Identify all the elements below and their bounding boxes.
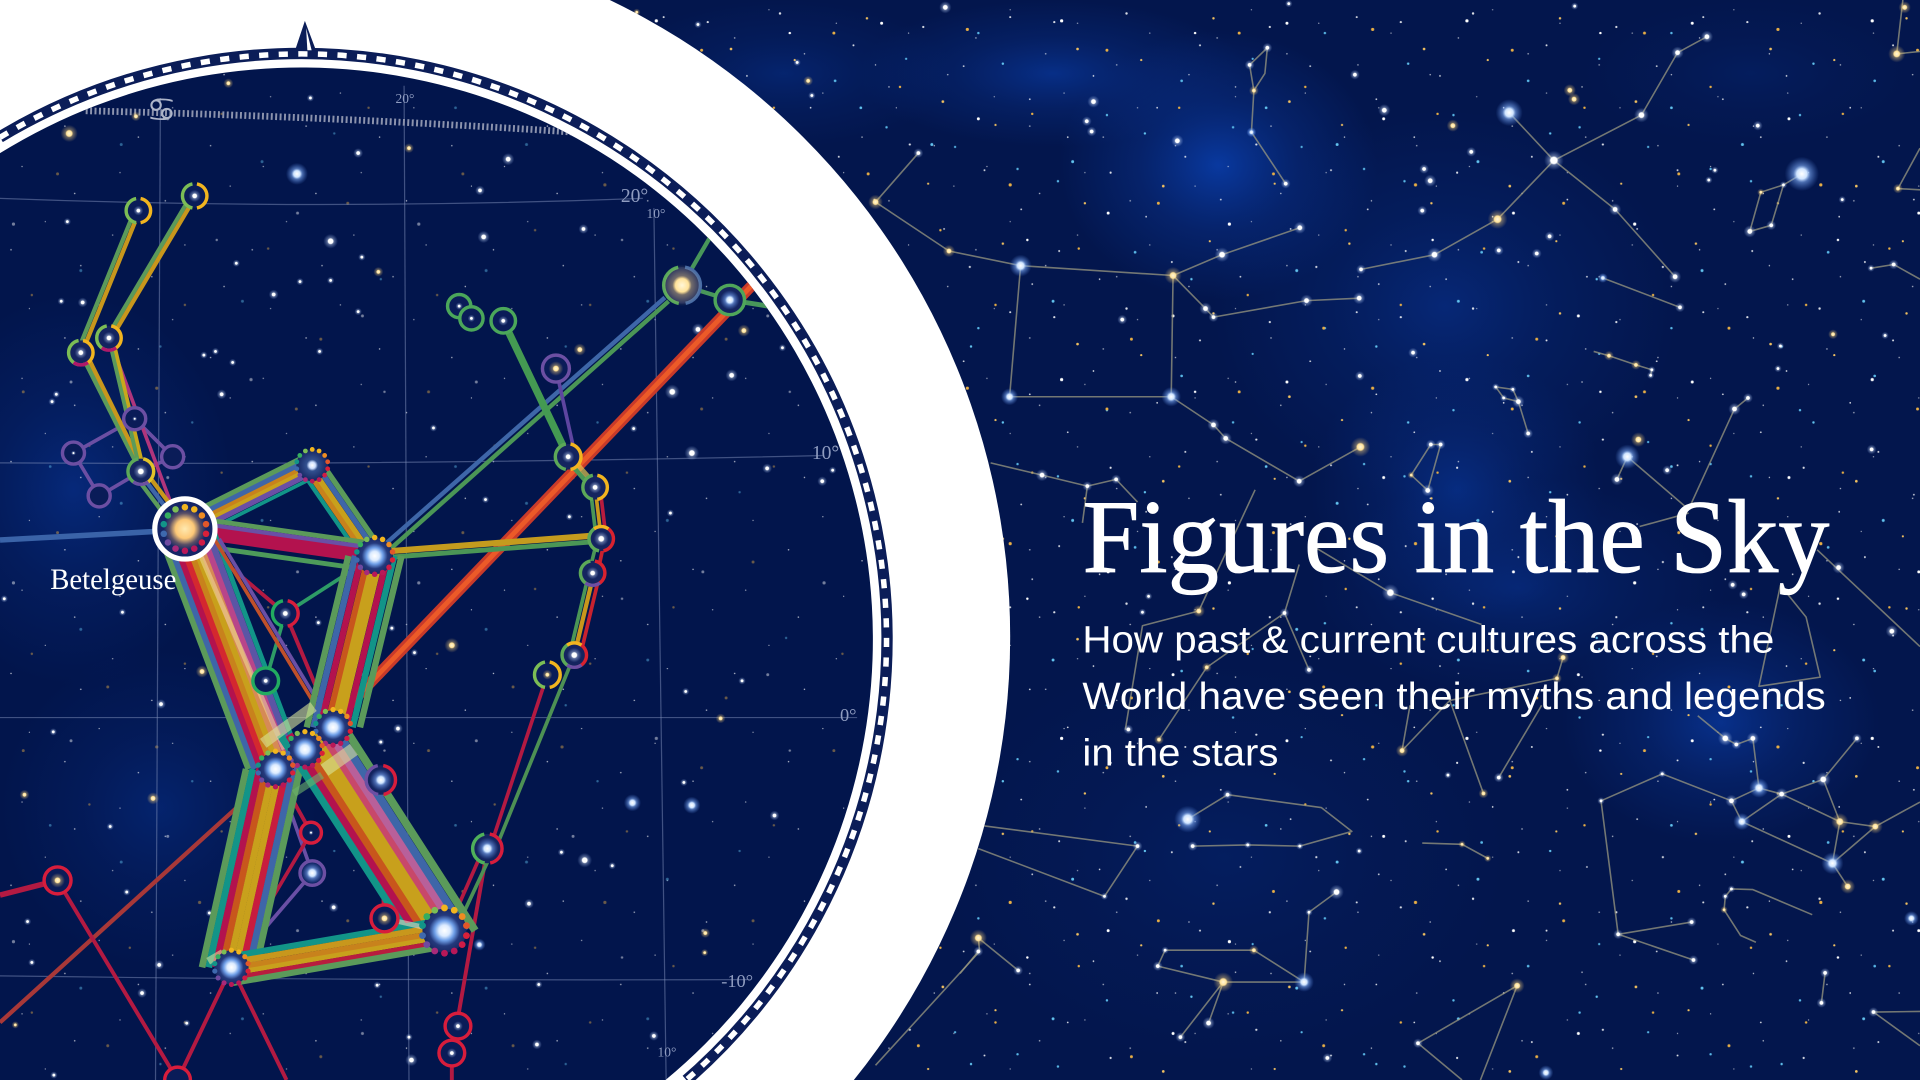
degree labels: 20°	[621, 186, 648, 207]
orion bundle: shoulder to head and head to shoulder	[206, 457, 374, 544]
degree labels: 0°	[840, 705, 857, 725]
thin figure lines	[0, 227, 784, 1080]
degree labels: -10°	[721, 971, 753, 991]
coordinate grid	[0, 86, 857, 1080]
star nodes: split rings	[69, 184, 744, 863]
orion bundle: belt to Saiph	[202, 769, 300, 967]
white circular frame	[0, 0, 1010, 1080]
star node cores	[50, 190, 740, 1058]
title: Figures in the Sky	[1082, 478, 1830, 595]
subtitle: in the stars	[1082, 732, 1278, 774]
constellation stars	[868, 31, 1905, 1080]
orion bundle: Betelgeuse to belt	[164, 533, 322, 770]
arm bundles	[80, 202, 192, 534]
degree labels: 20°	[396, 91, 414, 106]
orion bundle: Bellatrix to belt	[307, 556, 402, 727]
degree labels: 10°	[647, 206, 665, 221]
degree labels	[396, 91, 857, 1060]
loose background stars	[633, 0, 1919, 1063]
subtitle: How past & current cultures across the	[1082, 620, 1774, 662]
orion bundle: belt to Rigel	[280, 735, 475, 931]
Betelgeuse marker	[155, 499, 215, 559]
degree labels: 10°	[658, 1045, 676, 1060]
subtitle: World have seen their myths and legends	[1082, 676, 1826, 718]
north marker	[295, 21, 316, 50]
dial stars	[1, 78, 836, 1079]
dial rim	[0, 54, 887, 1080]
degree labels: 10°	[812, 443, 839, 464]
right arm bundle	[391, 464, 606, 646]
orion bundle: Betelgeuse to Bellatrix	[216, 518, 364, 572]
constellation lines	[876, 0, 1920, 1080]
star nodes: small rings	[44, 294, 569, 1080]
bright orion stars	[212, 447, 470, 987]
star dial	[0, 0, 931, 1080]
label: Betelgeuse: Betelgeuse	[50, 564, 176, 596]
subtitle	[1082, 620, 1826, 774]
dial sky	[0, 68, 873, 1080]
belt highlights	[208, 707, 422, 961]
cancer symbol: ♋	[147, 90, 176, 129]
ecliptic scale	[86, 111, 576, 132]
orion bundle: Saiph to Rigel	[231, 920, 444, 983]
